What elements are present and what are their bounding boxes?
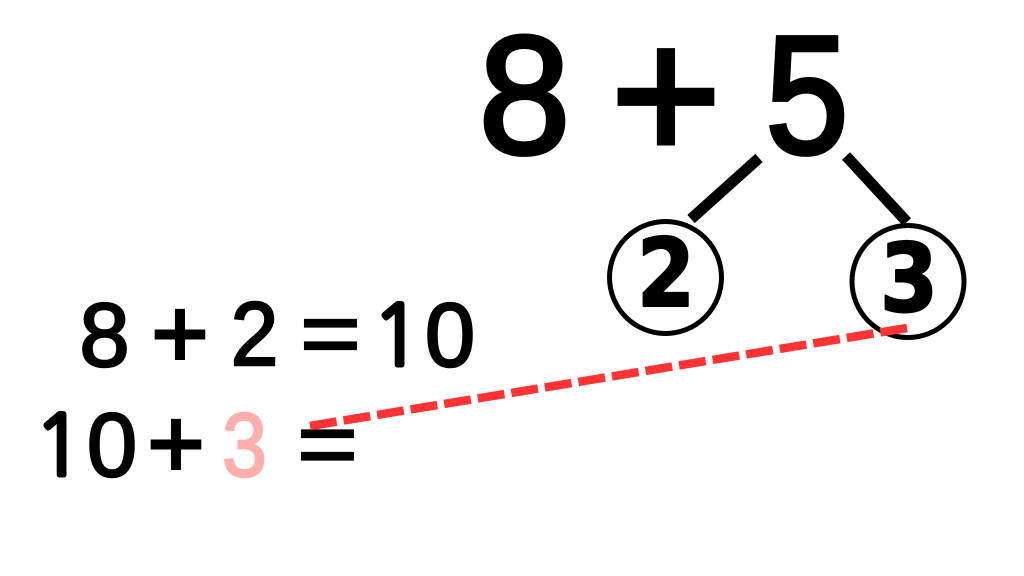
equation: 8 + 2 = 10: = [300, 282, 361, 383]
circle with 2: 2 [637, 219, 695, 329]
equation: 10 + 3 =: + [147, 388, 205, 498]
equation: 10 + 3 =: 3 [222, 396, 267, 496]
equation: 8 + 2 = 10: 1 [372, 294, 422, 378]
red dashed connector [310, 328, 907, 426]
circle with 3 [852, 224, 964, 338]
circle with 2 [610, 219, 722, 334]
circle with 3: 3 [880, 224, 938, 334]
equation: 10 + 3 =: 0 [87, 396, 137, 496]
heading equation: 8 + 5 [479, 0, 849, 201]
heading equation: 8 + 5: 5 [765, 1, 849, 189]
heading equation: 8 + 5: 8 [479, 1, 570, 189]
branch lines from 5 [691, 156, 907, 222]
equation: 8 + 2 = 10 [79, 278, 475, 388]
equation: 8 + 2 = 10: 0 [425, 286, 475, 386]
equation: 8 + 2 = 10: 8 [79, 286, 130, 386]
equation: 10 + 3 =: 1 [34, 404, 84, 488]
equation: 8 + 2 = 10: 2 [231, 284, 278, 384]
equation: 8 + 2 = 10: + [151, 278, 209, 388]
equation: 10 + 3 = [34, 388, 358, 498]
equation: 10 + 3 =: = [297, 393, 358, 494]
